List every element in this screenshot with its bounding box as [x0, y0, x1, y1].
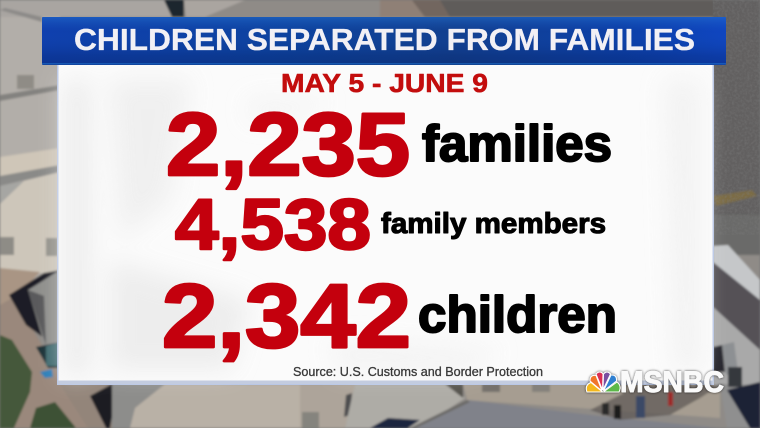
lower tent [60, 384, 120, 428]
statistic: children: children [418, 286, 617, 343]
source note: Source: U.S. Customs and Border Protection [293, 365, 543, 379]
icon: peacock [586, 372, 620, 392]
grey roof [410, 400, 720, 428]
portable toilets [713, 258, 760, 350]
panel: white board [57, 65, 714, 385]
statistic: family members [175, 186, 606, 265]
statistic: family members: 4,538 [175, 186, 371, 265]
people line [590, 385, 720, 420]
pavement [713, 307, 760, 392]
statistic: families [166, 94, 612, 194]
statistic: children: 2,342 [162, 267, 411, 367]
wordmark: MSNBC [620, 366, 724, 399]
statistic: families: families [422, 115, 612, 172]
MSNBC logo [586, 366, 724, 399]
date range: MAY 5 - JUNE 9 [281, 68, 488, 98]
statistic: family members: family members [381, 208, 606, 240]
asphalt on the right [380, 0, 760, 17]
left tent wall [0, 0, 60, 290]
title bar [42, 17, 726, 65]
statistic: families: 2,235 [166, 94, 410, 194]
grain texture on asphalt [713, 0, 760, 235]
heading: CHILDREN SEPARATED FROM FAMILIES [74, 23, 695, 57]
statistic: children [162, 267, 617, 367]
